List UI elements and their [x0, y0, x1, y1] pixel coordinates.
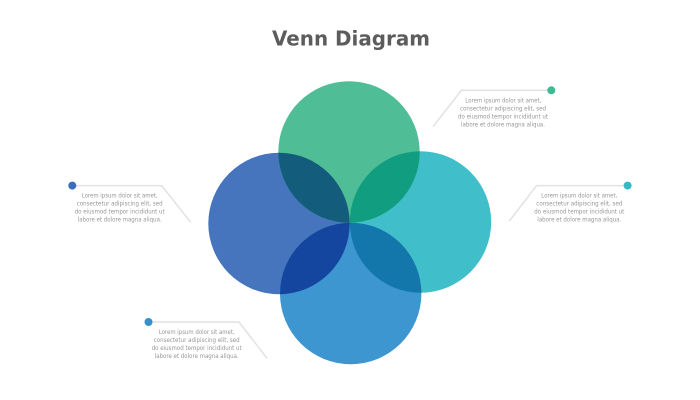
callout: bottom left	[144, 318, 267, 360]
callout: bottom left: Lorem ipsum dolor sit amet,	[159, 330, 235, 336]
circle: right	[350, 151, 491, 293]
callout: bottom left: labore et dolore magna aliqua.	[155, 354, 239, 360]
circle: left	[208, 153, 350, 294]
overlap: bottom and left	[280, 222, 350, 294]
overlap: top and right	[350, 151, 420, 223]
circle: bottom	[280, 223, 421, 364]
callout: left: labore et dolore magna aliqua.	[78, 218, 162, 224]
callout: right: do eiusmod tempor incididunt ut	[534, 209, 625, 215]
callout: left: do eiusmod tempor incididunt ut	[75, 210, 165, 216]
circle: top	[278, 81, 420, 223]
callout: top right	[433, 86, 555, 128]
venn diagram	[208, 81, 491, 364]
callout: top right: labore et dolore magna aliqua.	[461, 122, 545, 128]
callout: left: Lorem ipsum dolor sit amet,	[82, 194, 158, 200]
callout: bottom left: do eiusmod tempor incididunt ut	[152, 346, 242, 352]
title: Venn Diagram	[272, 26, 430, 50]
callout: right: Lorem ipsum dolor sit amet,	[541, 193, 617, 199]
callout: bottom left: consectetur adipiscing elit, sed	[154, 338, 240, 344]
callout: right: labore et dolore magna aliqua.	[537, 217, 621, 223]
callout: top right: consectetur adipiscing elit, sed	[460, 106, 546, 112]
overlap: top and left	[278, 152, 350, 223]
callout: top right: Lorem ipsum dolor sit amet,	[465, 98, 541, 104]
callout: left: consectetur adipiscing elit, sed	[77, 202, 163, 208]
callout: left	[68, 182, 191, 224]
overlap: bottom and right	[350, 222, 422, 293]
callout: top right: do eiusmod tempor incididunt ut	[458, 114, 549, 120]
callout: right: consectetur adipiscing elit, sed	[536, 201, 623, 207]
callout: right	[509, 182, 632, 223]
